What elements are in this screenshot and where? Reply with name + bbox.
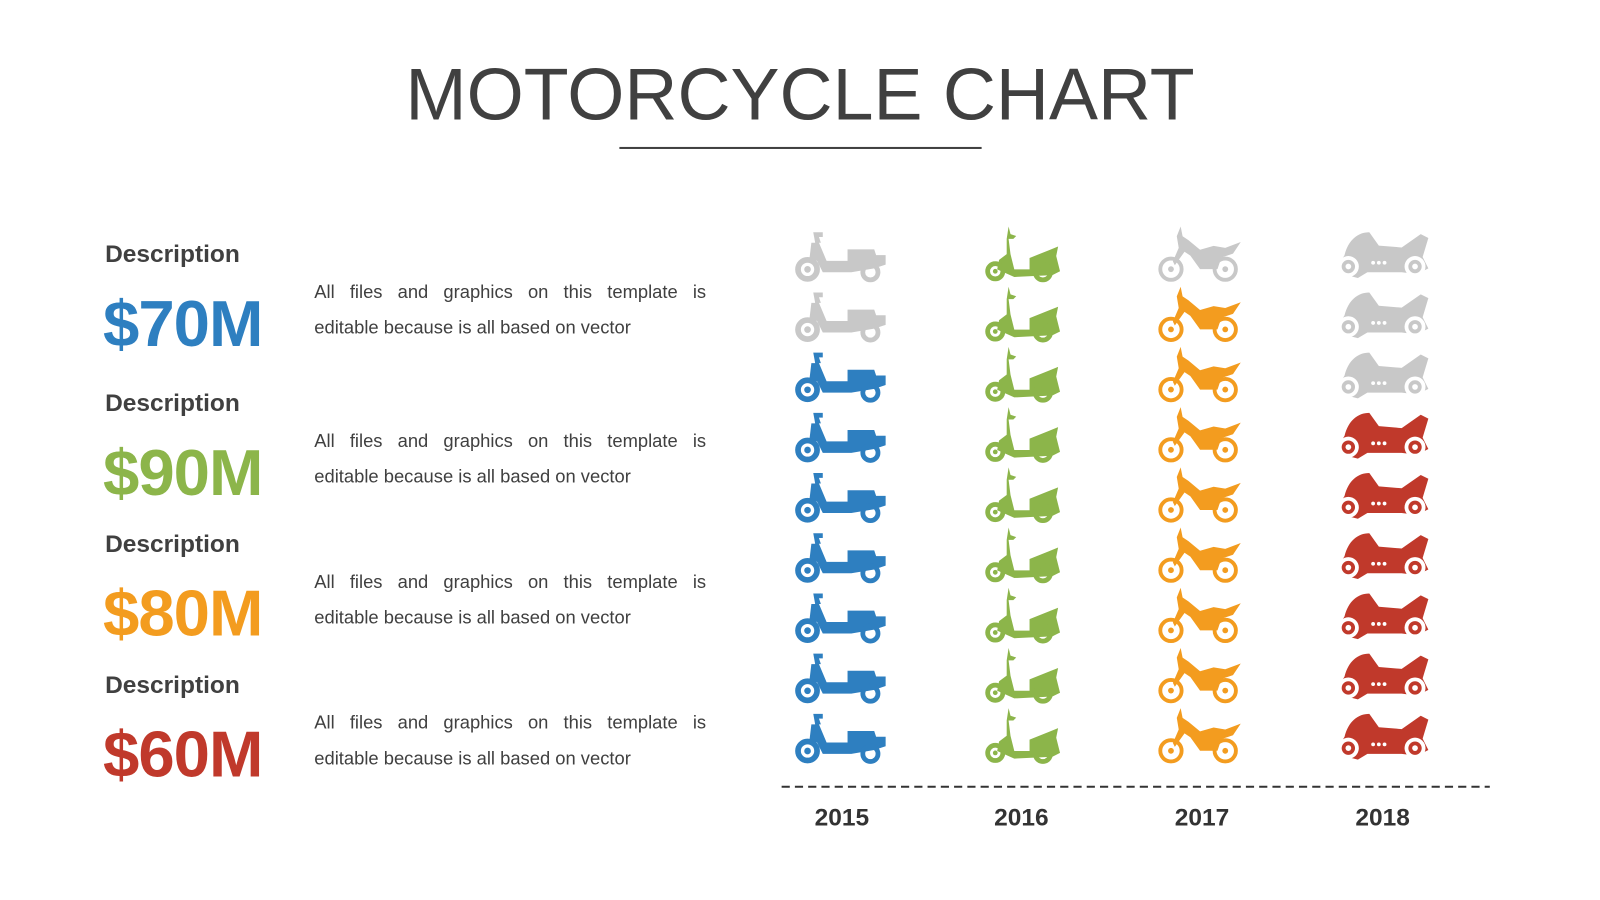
column 2015	[798, 232, 886, 761]
item 1	[103, 241, 706, 360]
text 3: editable because is all based on vector	[314, 607, 631, 628]
text 2: All files and graphics on this template is	[314, 431, 706, 451]
text 1: All files and graphics on this template is	[314, 282, 706, 302]
heading 2: Description	[105, 390, 240, 417]
text 4: editable because is all based on vector	[314, 748, 631, 768]
item 2	[103, 390, 706, 509]
value 3: $80M	[103, 577, 262, 650]
item 4	[103, 671, 706, 791]
value 2: $90M	[103, 436, 262, 509]
text 1	[314, 282, 706, 338]
title: MOTORCYCLE CHART	[405, 54, 1195, 136]
item 3	[103, 531, 706, 650]
label 2015: 2015	[815, 804, 869, 832]
value 4: $60M	[103, 717, 262, 791]
year labels	[815, 804, 1410, 832]
text 3	[314, 571, 706, 628]
text 2	[314, 431, 706, 487]
column 2017	[1160, 227, 1241, 761]
heading 3: Description	[105, 531, 240, 558]
label 2018: 2018	[1355, 804, 1410, 832]
heading 4: Description	[105, 671, 240, 699]
title underline	[619, 147, 982, 149]
text 4: All files and graphics on this template is	[314, 712, 706, 733]
text 4	[314, 712, 706, 768]
column 2016	[988, 227, 1060, 761]
text 1: editable because is all based on vector	[314, 317, 631, 338]
heading 1: Description	[105, 241, 240, 268]
text 3: All files and graphics on this template is	[314, 571, 706, 592]
text 2: editable because is all based on vector	[314, 466, 631, 487]
label 2016: 2016	[994, 804, 1049, 832]
column 2018	[1338, 232, 1428, 760]
label 2017: 2017	[1175, 804, 1229, 832]
value 1: $70M	[103, 287, 262, 360]
